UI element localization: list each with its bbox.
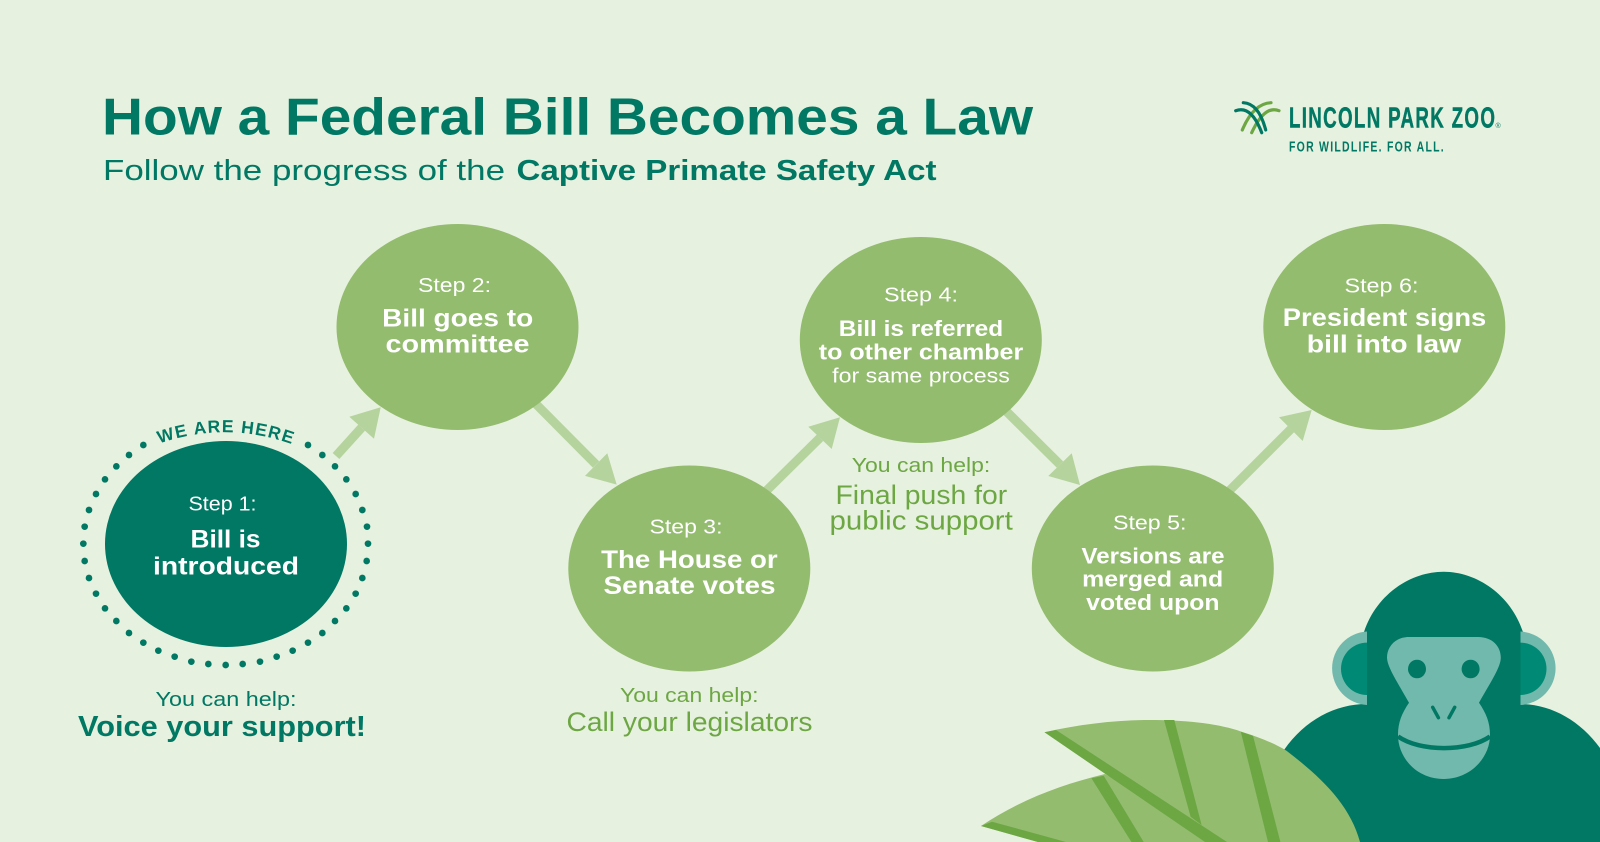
illustration: upper leaf [1044, 720, 1360, 842]
step 6: President signs [1283, 304, 1486, 332]
arrow: step 4 to step 5 [1000, 405, 1080, 485]
illustration: gorilla [1284, 572, 1600, 842]
logo: Lincoln Park Zoo: FOR WILDLIFE. FOR ALL. [1289, 138, 1444, 155]
step 4 call to action: public support [830, 506, 1013, 536]
step 4: Step 4: [884, 285, 958, 307]
step 2: committee [386, 330, 530, 358]
step 4 call to action: Final push for [836, 480, 1007, 510]
right ear [1520, 632, 1556, 705]
step 4 call to action [830, 454, 1013, 536]
step 2 [336, 224, 578, 430]
step 4: Bill is referred [839, 316, 1003, 341]
step 6 [1263, 224, 1505, 430]
body and head [1284, 572, 1600, 842]
step 2: Bill goes to [382, 304, 533, 332]
step 5: Versions are [1082, 544, 1224, 569]
arrow: step 3 to step 4 [760, 417, 840, 497]
step 6: Step 6: [1344, 276, 1418, 298]
subtitle: Follow the progress of the [103, 155, 505, 187]
step 5: merged and [1082, 567, 1223, 592]
step 1: Step 1: [188, 494, 256, 516]
step 2: Step 2: [418, 275, 491, 297]
logo: Lincoln Park Zoo: LINCOLN PARK ZOO [1289, 103, 1495, 134]
step 6: bill into law [1307, 331, 1462, 359]
subtitle: Captive Primate Safety Act [516, 155, 937, 187]
left ear [1332, 632, 1367, 705]
step 1 [105, 441, 347, 647]
step 1: introduced [153, 552, 299, 580]
step 3: Step 3: [650, 517, 722, 539]
subtitle [103, 155, 937, 187]
logo: Lincoln Park Zoo [1236, 103, 1502, 155]
step 5: Step 5: [1113, 512, 1186, 534]
we are here: dotted ring [80, 442, 371, 668]
step 4 [800, 237, 1042, 443]
step 1: Bill is [190, 526, 260, 554]
step 3 call to action: You can help: [620, 684, 758, 707]
icon: grass logo mark [1236, 103, 1279, 133]
step 4 call to action: You can help: [852, 454, 990, 477]
step 4: for same process [832, 365, 1010, 388]
step 1 call to action [78, 688, 366, 743]
step 3 [568, 466, 810, 672]
mouth [1398, 736, 1490, 748]
nostrils [1433, 707, 1455, 718]
step 3: Senate votes [604, 572, 776, 600]
logo: Lincoln Park Zoo: ® [1496, 122, 1502, 130]
face [1387, 637, 1501, 779]
step 1 call to action: Voice your support! [78, 711, 366, 743]
title: How a Federal Bill Becomes a Law [102, 88, 1034, 146]
arrow: step 1 to step 2 [336, 407, 381, 456]
we are here: curved label: WE ARE HERE [156, 420, 294, 444]
step 3 call to action [566, 684, 812, 737]
step 3: The House or [601, 546, 778, 574]
step 5 [1032, 466, 1274, 672]
arrow: step 5 to step 6 [1224, 410, 1312, 496]
step 4: to other chamber [819, 339, 1024, 364]
eyes [1408, 660, 1480, 678]
arrow: step 2 to step 3 [530, 398, 617, 485]
illustration: lower leaf [981, 774, 1225, 842]
step 5: voted upon [1086, 590, 1220, 615]
step 1 call to action: You can help: [156, 688, 296, 711]
step 3 call to action: Call your legislators [566, 707, 812, 737]
